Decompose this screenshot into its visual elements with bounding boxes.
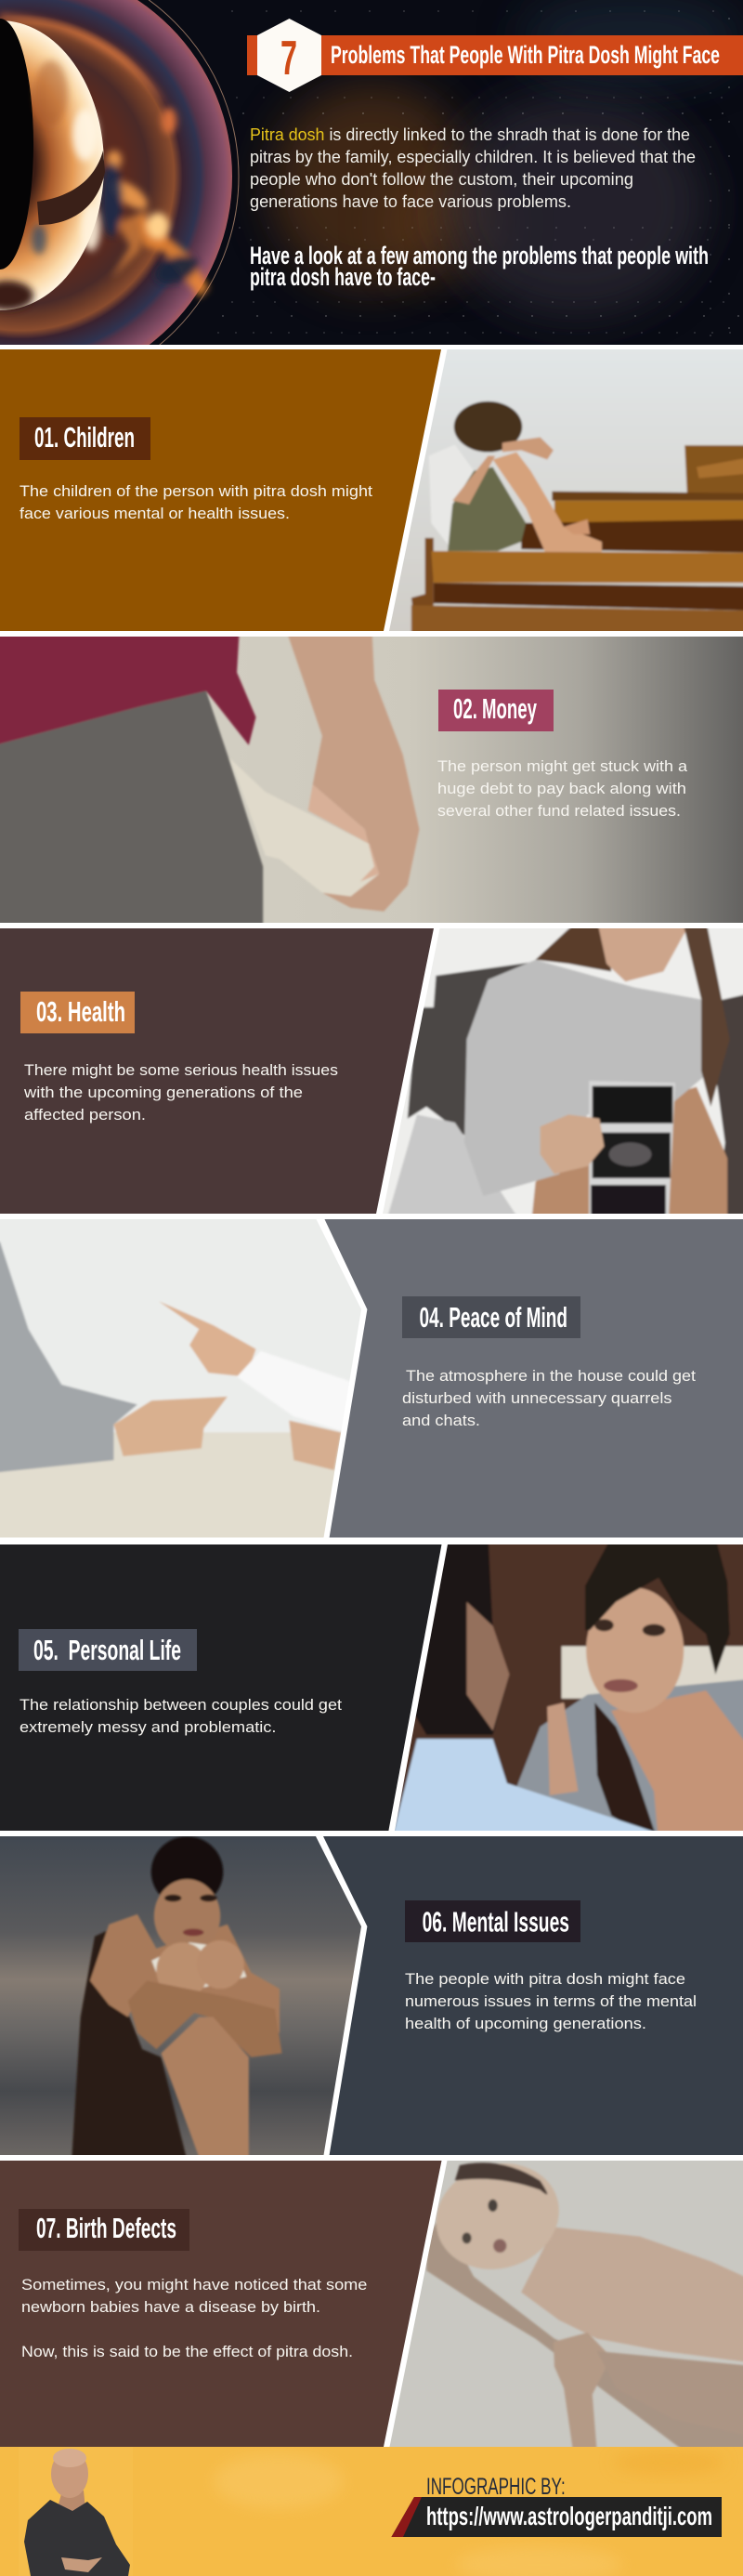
description: face various mental or health issues. (20, 506, 290, 522)
intro paragraph: Pitra dosh is directly linked to the shradh that is done for the (250, 125, 690, 144)
intro paragraph: people who don't follow the custom, their upcoming (250, 169, 633, 189)
label: 05 personal life: 05. Personal Life (33, 1634, 181, 1666)
description: There might be some serious health issues (24, 1062, 338, 1079)
intro paragraph: generations have to face various problems. (250, 191, 571, 211)
panel background (323, 1836, 743, 2155)
hexagon number badge (257, 19, 321, 92)
description (405, 1971, 697, 2032)
title band (247, 35, 743, 75)
description: health of upcoming generations. (405, 2016, 646, 2032)
label: 03 health (20, 992, 135, 1033)
photo: distressed woman (0, 1836, 372, 2170)
label: 07 birth defects (19, 2209, 189, 2251)
description: Now, this is said to be the effect of pitra dosh. (21, 2344, 353, 2360)
description: with the upcoming generations of the (23, 1084, 303, 1101)
description: The person might get stuck with a (437, 758, 688, 775)
label: 04 peace of mind: 04. Peace of Mind (420, 1301, 567, 1334)
description (20, 1697, 342, 1736)
label: 02 money (438, 690, 554, 731)
panel: 03 health (0, 920, 743, 1229)
panel background (0, 349, 441, 631)
photo: arguing couple (395, 1544, 743, 1831)
description: The atmosphere in the house could get (406, 1368, 696, 1385)
label: 06 mental issues (405, 1900, 580, 1942)
credit bar with url (391, 2497, 722, 2537)
label: 03 health: 03. Health (36, 995, 125, 1028)
description: several other fund related issues. (437, 803, 681, 820)
description: disturbed with unnecessary quarrels (402, 1390, 672, 1407)
panel: 05 personal life (0, 1533, 743, 1844)
description: and chats. (402, 1413, 480, 1429)
panel: 01 children (0, 344, 743, 642)
label: 05 personal life (19, 1629, 197, 1671)
intro call to action: pitra dosh have to face- (250, 263, 436, 291)
intro paragraph (250, 125, 696, 211)
description: Sometimes, you might have noticed that some (21, 2277, 367, 2293)
icon: planet with rings (0, 0, 240, 345)
panel: 06 mental issues (0, 1836, 743, 2170)
description: The relationship between couples could get (20, 1697, 342, 1714)
description: newborn babies have a disease by birth. (21, 2299, 320, 2316)
description: huge debt to pay back along with (437, 781, 686, 797)
description (23, 1062, 338, 1124)
intro call to action (250, 242, 709, 291)
author portrait (24, 2449, 130, 2576)
photo: child on stairs (379, 344, 743, 642)
label: 04 peace of mind (402, 1296, 580, 1338)
description: The children of the person with pitra dosh might (20, 483, 372, 500)
panel: 02 money (0, 631, 743, 934)
label: 06 mental issues: 06. Mental Issues (423, 1905, 569, 1939)
panel background (0, 2161, 442, 2447)
label: 01 children: 01. Children (34, 421, 135, 453)
label: 01 children (20, 417, 150, 460)
photo: newborn baby on hand (381, 2157, 743, 2453)
description (437, 758, 688, 820)
description (21, 2277, 367, 2360)
label: 07 birth defects: 07. Birth Defects (36, 2212, 176, 2244)
description: The people with pitra dosh might face (405, 1971, 685, 1988)
description: affected person. (24, 1107, 146, 1124)
description (20, 483, 372, 522)
credit heading: INFOGRAPHIC BY: (426, 2474, 566, 2500)
label: 02 money: 02. Money (453, 692, 537, 725)
panel: header (0, 0, 743, 345)
description (402, 1368, 696, 1429)
intro paragraph: pitras by the family, especially children. It is believed that the (250, 147, 696, 166)
panel background (0, 928, 434, 1214)
description: extremely messy and problematic. (20, 1719, 277, 1736)
panel: 04 peace of mind (0, 1210, 743, 1552)
space background (137, 0, 743, 345)
photo: pregnant woman with ultrasound (383, 928, 743, 1214)
panel background (0, 1544, 442, 1831)
panel background (325, 1219, 743, 1537)
panel: footer (0, 2447, 743, 2576)
panel: 07 birth defects (0, 2157, 743, 2453)
footer background (0, 2447, 743, 2576)
description: numerous issues in terms of the mental (405, 1993, 697, 2010)
photo: empty pocket (0, 631, 743, 934)
hexagon number badge: 7 (280, 32, 297, 85)
photo: quarrelling hands (0, 1219, 361, 1537)
